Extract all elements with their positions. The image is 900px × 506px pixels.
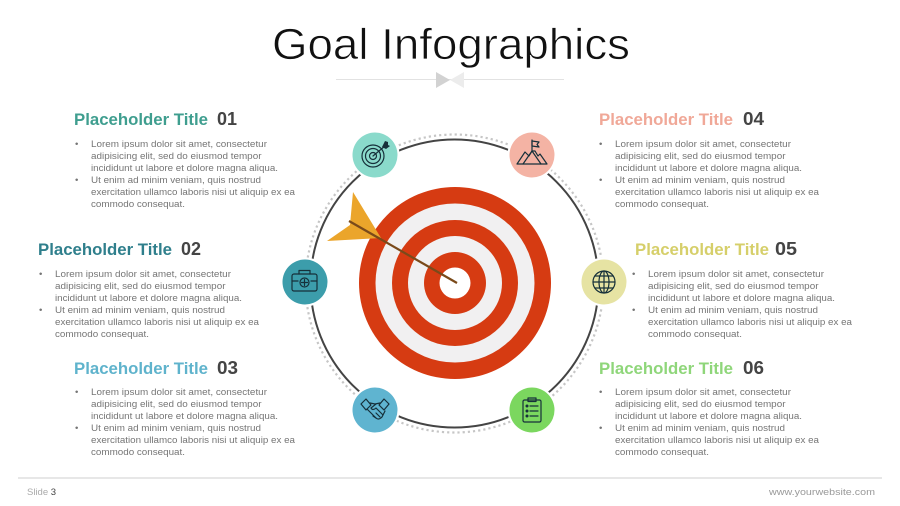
- panel: item 03: Placeholder Title: [74, 359, 208, 378]
- panel: item 02: [38, 238, 260, 340]
- title divider with bow ornament: [336, 72, 564, 88]
- panel: item 03: 03: [217, 357, 238, 378]
- icon badge 02: medical case: [282, 260, 328, 304]
- icon badge 06: clipboard: [510, 388, 554, 432]
- panel: item 05: [632, 238, 853, 340]
- panel: item 04: Placeholder Title: [599, 110, 733, 129]
- panel: item 02: 02: [181, 238, 201, 259]
- panel: item 01: 01: [217, 108, 237, 129]
- panel: item 05: Placeholder Title: [635, 240, 769, 259]
- panel: item 03: [74, 357, 296, 458]
- arrow: [327, 192, 457, 283]
- icon badge 01: target: [352, 132, 398, 178]
- panel: item 04: 04: [743, 108, 765, 129]
- panel: item 01: [74, 108, 296, 210]
- footer slide number: Slide 3: [27, 487, 56, 498]
- footer rule: [18, 477, 882, 479]
- icon badge 03: handshake: [352, 388, 398, 432]
- panel: item 04: [599, 108, 820, 210]
- panel: item 06: [599, 357, 820, 458]
- panel: item 01: Placeholder Title: [74, 110, 208, 129]
- icon badge 04: mountain flag: [510, 132, 554, 178]
- target bullseye: [359, 187, 551, 379]
- panel: item 06: 06: [743, 357, 764, 378]
- solid ring: [310, 140, 598, 428]
- footer website: www.yourwebsite.com: [768, 487, 875, 498]
- title: Goal Infographics: [272, 20, 630, 69]
- panel: item 06: Placeholder Title: [599, 359, 733, 378]
- panel: item 02: Placeholder Title: [38, 240, 172, 259]
- icon badge 05: globe: [582, 260, 626, 304]
- panel: item 05: 05: [775, 238, 797, 259]
- dotted outer ring: [306, 134, 604, 432]
